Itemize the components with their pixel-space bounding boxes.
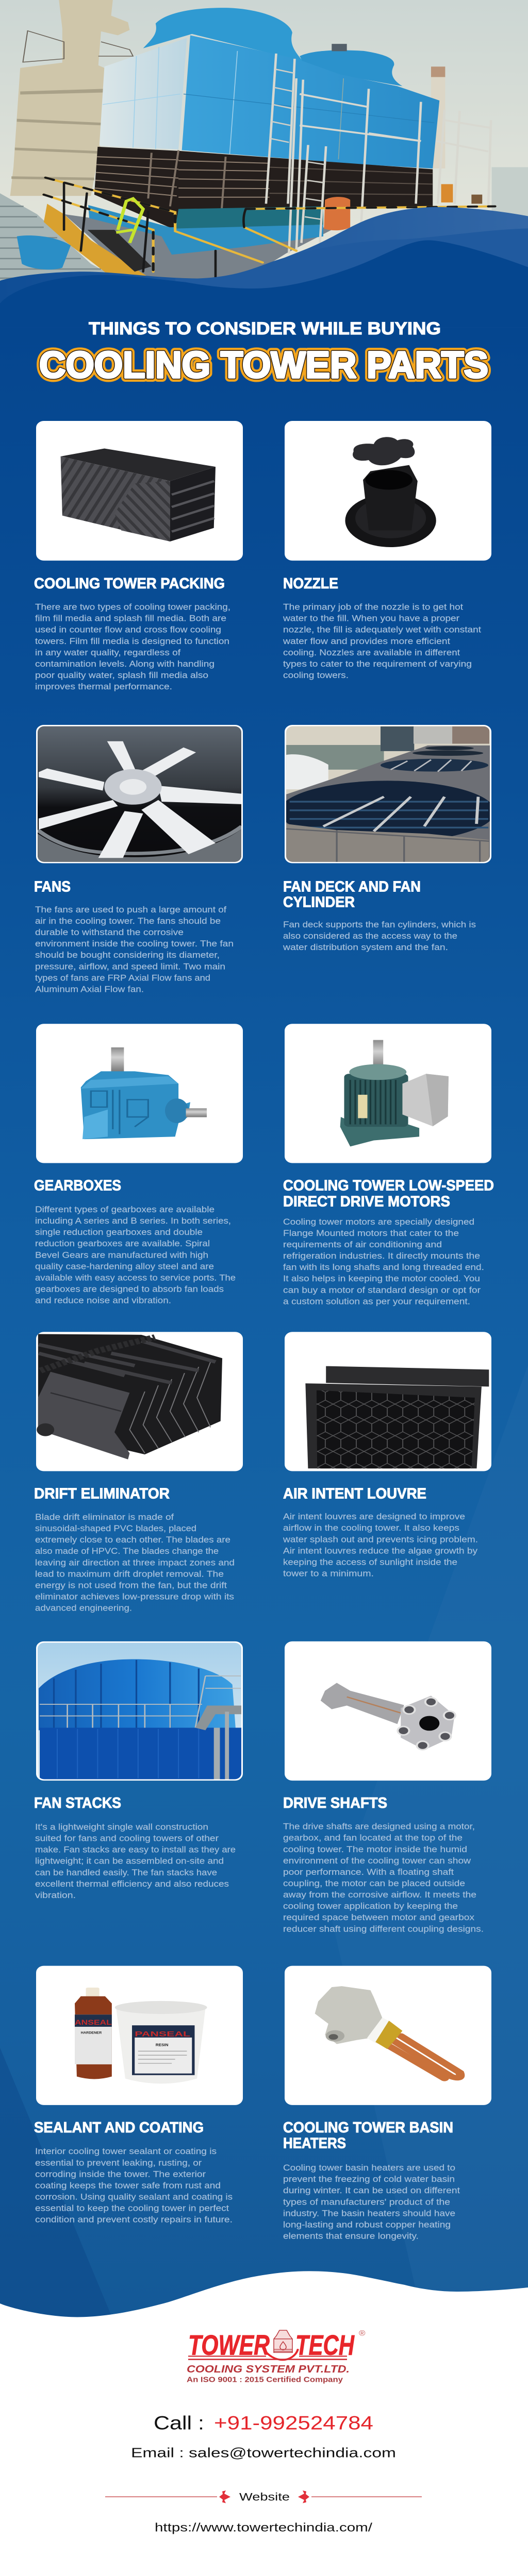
text block bbox=[283, 1512, 478, 1578]
image: drive shaft bbox=[285, 1641, 491, 1781]
text block: and reduce noise and vibration. bbox=[35, 1296, 171, 1305]
text block: long-lasting and robust copper heating bbox=[283, 2219, 451, 2229]
roof left bbox=[0, 193, 114, 285]
text block: corroding inside the tower. The exterior bbox=[35, 2169, 206, 2179]
footer white wave bbox=[0, 2271, 528, 2576]
hero photo: cooling tower bbox=[0, 0, 528, 281]
text block: gearbox, and fan located at the top of the bbox=[283, 1833, 463, 1842]
text block: lead to maximum drift droplet removal. The bbox=[35, 1569, 224, 1579]
heading: GEARBOXES bbox=[34, 1178, 121, 1194]
text block: There are two types of cooling tower packing, bbox=[35, 602, 230, 612]
text block bbox=[35, 1205, 236, 1305]
text block: gearboxes are designed to absorb fan loads bbox=[35, 1284, 224, 1294]
text block: also made of HPVC. The blades change the bbox=[35, 1546, 219, 1556]
text block bbox=[283, 602, 481, 680]
fan stack 2 bbox=[300, 50, 402, 86]
panel: drive shafts bbox=[283, 1641, 491, 1934]
text block: also considered as the access way to the bbox=[283, 931, 457, 941]
text block: Different types of gearboxes are available bbox=[35, 1205, 214, 1214]
heading: SEALANT AND COATING bbox=[34, 2120, 204, 2136]
yellow deck side bbox=[44, 204, 148, 277]
text block: cooling. Nozzles are available in different bbox=[283, 648, 460, 657]
text block bbox=[283, 920, 476, 952]
text block: cooling towers. bbox=[283, 670, 349, 680]
text block: make. Fan stacks are easy to install as they are bbox=[35, 1845, 236, 1854]
text block: poor performance. With a floating shaft bbox=[283, 1867, 454, 1877]
text block: cooling tower. The motor inside the humid bbox=[283, 1844, 467, 1854]
panel: sealant and coating bbox=[34, 1966, 243, 2224]
heading bbox=[283, 1178, 494, 1210]
text block: Cooling tower basin heaters are used to bbox=[283, 2163, 455, 2173]
text block: poor quality water, splash fill media also bbox=[35, 670, 208, 680]
text block: quality case-hardening alloy steel and are bbox=[35, 1261, 214, 1271]
text block bbox=[35, 602, 230, 691]
company name: COOLING SYSTEM PVT.LTD. bbox=[187, 2363, 350, 2375]
safety harness bbox=[116, 198, 143, 243]
text block: eliminator achieves low-pressure drop with its bbox=[35, 1592, 234, 1601]
tower front face bbox=[182, 35, 439, 168]
text block: durable to withstand the corrosive bbox=[35, 927, 184, 937]
logo arc and rules bbox=[188, 2348, 347, 2360]
image: sealant products bbox=[36, 1966, 243, 2105]
text block: It also helps in keeping the motor cooled. You bbox=[283, 1274, 480, 1283]
heading bbox=[283, 879, 421, 910]
text block bbox=[283, 2163, 460, 2241]
text block: The fans are used to push a large amount of bbox=[35, 905, 226, 914]
text block: The drive shafts are designed using a motor, bbox=[283, 1822, 475, 1831]
text block: suited for fans and cooling towers of other bbox=[35, 1834, 219, 1843]
heading: AIR INTENT LOUVRE bbox=[283, 1486, 426, 1502]
text block: vibration. bbox=[35, 1890, 76, 1900]
panel: fan deck and fan cylinder bbox=[279, 725, 495, 952]
text block: airflow in the cooling tower. It also keeps bbox=[283, 1523, 459, 1533]
panel: fan stacks bbox=[34, 1641, 243, 1900]
text block: types of fans are FRP Axial Flow fans and bbox=[35, 973, 210, 982]
heading: NOZZLE bbox=[283, 576, 338, 592]
heading: COOLING TOWER BASIN bbox=[283, 2120, 453, 2136]
orange drum bbox=[324, 197, 350, 230]
blue basin bbox=[88, 205, 323, 255]
heading: COOLING TOWER PACKING bbox=[34, 576, 225, 592]
text block: leaving air direction at three impact zones and bbox=[35, 1557, 235, 1567]
icon: cooling tower with water drop bbox=[274, 2330, 292, 2352]
logo wordmark: TECH bbox=[295, 2330, 355, 2361]
panel: air intent louvre bbox=[283, 1332, 491, 1578]
louver slats bbox=[95, 157, 433, 197]
image: nozzle bbox=[285, 421, 491, 561]
blue tub bbox=[17, 235, 71, 269]
text block: requirements of air conditioning and bbox=[283, 1240, 442, 1249]
railings bbox=[44, 178, 495, 277]
image: sealant products: HARDENER bbox=[81, 2031, 102, 2035]
text block: should be bought considering its diameter, bbox=[35, 950, 220, 960]
image: sealant products: PANSEAL bbox=[135, 2030, 190, 2038]
website url: https://www.towertechindia.com/ bbox=[155, 2521, 372, 2534]
text block: corrosion. Using quality sealant and coating is bbox=[35, 2192, 233, 2201]
phone line: Call : bbox=[154, 2413, 204, 2434]
panel: cooling tower packing bbox=[34, 421, 243, 691]
text block: essential to keep the cooling tower in perfect bbox=[35, 2204, 229, 2213]
text block: contamination levels. Along with handling bbox=[35, 659, 214, 669]
text block: in any water quality, regardless of bbox=[35, 648, 180, 657]
website label: Website bbox=[239, 2491, 290, 2503]
heading: DRIVE SHAFTS bbox=[283, 1795, 387, 1811]
text block: essential to prevent leaking, rusting, or bbox=[35, 2158, 202, 2167]
image: packing block bbox=[36, 421, 243, 561]
heading: CYLINDER bbox=[283, 894, 355, 910]
text block: including A series and B series. In both series, bbox=[35, 1216, 231, 1226]
text block: coupling, the motor can be placed outside bbox=[283, 1878, 465, 1888]
text block: towers. Film fill media is designed to function bbox=[35, 636, 229, 646]
far chimney bbox=[431, 66, 445, 168]
text block: Air intent louvres reduce the algae growth by bbox=[283, 1546, 477, 1555]
motor atop stack 2 bbox=[332, 44, 347, 51]
heading: DRIFT ELIMINATOR bbox=[34, 1486, 170, 1502]
panel: drift eliminator bbox=[34, 1332, 243, 1613]
heading: HEATERS bbox=[283, 2136, 346, 2151]
background shape left bbox=[0, 2048, 113, 2321]
text block: water flow and provides more efficient bbox=[283, 636, 450, 646]
text block: advanced engineering. bbox=[35, 1603, 132, 1613]
text block bbox=[35, 2146, 233, 2224]
heading: COOLING TOWER LOW-SPEED bbox=[283, 1178, 494, 1194]
beige scrubber tower bbox=[10, 0, 133, 196]
text block: water splash out and prevents icing problem. bbox=[283, 1534, 478, 1544]
title: things to consider while buying: THINGS TO CONSIDER WHILE BUYING bbox=[89, 318, 441, 338]
text block: excellent thermal efficiency and also reduces bbox=[35, 1879, 229, 1889]
heading: DIRECT DRIVE MOTORS bbox=[283, 1194, 450, 1210]
text block: Blade drift eliminator is made of bbox=[35, 1512, 174, 1522]
image: basin heater bbox=[285, 1966, 491, 2105]
text block: reduction gearboxes are available. Spiral bbox=[35, 1239, 210, 1248]
text block: away from the corrosive airflow. It meets the bbox=[283, 1890, 476, 1900]
text block: cooling tower application by keeping the bbox=[283, 1901, 458, 1911]
sky bbox=[0, 0, 528, 271]
tower left face bbox=[100, 38, 187, 149]
text block bbox=[283, 1822, 484, 1934]
heading: FAN DECK AND FAN bbox=[283, 879, 421, 895]
image: drift eliminator bbox=[36, 1332, 243, 1471]
image: louvre bbox=[285, 1332, 491, 1472]
panel: cooling tower basin heaters bbox=[283, 1966, 491, 2241]
text block: The primary job of the nozzle is to get hot bbox=[283, 602, 463, 612]
text block: industry. The basin heaters should have bbox=[283, 2208, 455, 2218]
heading: FANS bbox=[34, 879, 71, 895]
image: sealant products: RESIN bbox=[156, 2043, 169, 2047]
louver section bbox=[94, 147, 433, 230]
background shape right bbox=[330, 1365, 528, 2321]
image: gearbox bbox=[36, 1024, 243, 1163]
deck floor bbox=[64, 214, 337, 285]
text block: types of manufacturers' product of the bbox=[283, 2197, 450, 2207]
text block: during winter. It can be used on different bbox=[283, 2185, 460, 2195]
text block: keeping the access of sunlight inside the bbox=[283, 1557, 457, 1567]
text block: required space between motor and gearbox bbox=[283, 1912, 474, 1922]
text block: a custom solution as per your requirement. bbox=[283, 1296, 470, 1306]
text block: environment of the cooling tower can show bbox=[283, 1856, 471, 1866]
email line: Email : sales@towertechindia.com bbox=[131, 2445, 396, 2460]
phone line: +91-992524784 bbox=[214, 2413, 373, 2434]
image: sealant products: ANSEAL bbox=[75, 2019, 112, 2026]
text block: air in the cooling tower. The fans should be bbox=[35, 916, 221, 926]
text block: condition and prevent costly repairs in future. bbox=[35, 2215, 233, 2224]
wave: outer light layer bbox=[0, 207, 528, 328]
text block: single reduction gearboxes and double bbox=[35, 1227, 203, 1237]
text block: prevent the freezing of cold water basin bbox=[283, 2174, 455, 2184]
text block: Cooling tower motors are specially designed bbox=[283, 1217, 474, 1227]
panel: gearboxes bbox=[34, 1024, 243, 1305]
text block: coating keeps the tower safe from rust and bbox=[35, 2181, 221, 2190]
text block: extremely close to each other. The blades are bbox=[35, 1535, 230, 1545]
image: fan bbox=[36, 725, 243, 863]
text block: types to cater to the requirement of varying bbox=[283, 659, 472, 669]
heading bbox=[283, 2120, 453, 2151]
text block: sinusoidal-shaped PVC blades, placed bbox=[35, 1523, 196, 1533]
registered mark: ® bbox=[359, 2329, 366, 2337]
text block: It's a lightweight single wall construction bbox=[35, 1822, 208, 1832]
wave: dark layer bbox=[0, 240, 528, 328]
logo wordmark: TOWER bbox=[188, 2330, 270, 2361]
text block bbox=[35, 1512, 235, 1613]
text block bbox=[283, 1217, 484, 1306]
text block bbox=[35, 905, 234, 994]
image: motor bbox=[285, 1024, 491, 1163]
text block: water distribution system and the fan. bbox=[283, 942, 448, 952]
workers bbox=[441, 184, 482, 204]
text block: elements that ensure longevity. bbox=[283, 2231, 419, 2241]
text block: Fan deck supports the fan cylinders, which is bbox=[283, 920, 476, 929]
text block: lightweight; it can be assembled on-site and bbox=[35, 1856, 224, 1866]
image: fan deck bbox=[279, 725, 495, 863]
ladders and aluminium frames bbox=[266, 54, 491, 253]
text block: nozzle, the fill is adequately wet with constant bbox=[283, 625, 481, 634]
wave: middle layer bbox=[175, 228, 528, 328]
panel: nozzle bbox=[283, 421, 491, 680]
fan stack 1 bbox=[143, 8, 303, 61]
panel: fans bbox=[34, 725, 243, 994]
text block bbox=[35, 1822, 236, 1900]
text block: Interior cooling tower sealant or coating is bbox=[35, 2146, 217, 2156]
icon: fleur left bbox=[219, 2490, 230, 2503]
text block: reducer shaft using different coupling designs. bbox=[283, 1924, 484, 1934]
image: fan stack bbox=[36, 1641, 243, 1781]
certification line: An ISO 9001 : 2015 Certified Company bbox=[187, 2376, 343, 2384]
text block: improves thermal performance. bbox=[35, 682, 172, 691]
text block: Flange Mounted motors that cater to the bbox=[283, 1228, 459, 1238]
text block: Aluminum Axial Flow fan. bbox=[35, 984, 144, 994]
text block: energy is not used from the fan, but the drift bbox=[35, 1581, 227, 1590]
text block: refrigeration industries. It directly mounts the bbox=[283, 1251, 480, 1261]
text block: Air intent louvres are designed to improve bbox=[283, 1512, 465, 1521]
text block: environment inside the cooling tower. The fan bbox=[35, 939, 234, 948]
text block: used in counter flow and cross flow cooling bbox=[35, 625, 221, 634]
panel seams bbox=[103, 47, 434, 159]
text block: water to the fill. When you have a proper bbox=[283, 614, 459, 623]
icon: fleur right bbox=[298, 2490, 309, 2503]
text block: can be handled easily. The fan stacks have bbox=[35, 1868, 217, 1877]
panel: direct drive motors bbox=[283, 1024, 494, 1306]
text block: fan with its long shafts and long threaded end. bbox=[283, 1262, 484, 1272]
text block: pressure, airflow, and speed limit. Two main bbox=[35, 961, 225, 971]
text block: tower to a minimum. bbox=[283, 1569, 374, 1578]
right pale roof bbox=[492, 167, 528, 216]
text block: Bevel Gears are manufactured with high bbox=[35, 1250, 208, 1260]
website divider bbox=[105, 2490, 422, 2503]
heading: FAN STACKS bbox=[34, 1795, 121, 1811]
text block: available with easy access to service ports. The bbox=[35, 1273, 236, 1282]
phone line bbox=[154, 2413, 373, 2434]
logo: Tower Tech bbox=[187, 2329, 366, 2384]
text block: can buy a motor of standard design or opt for bbox=[283, 1285, 481, 1295]
text block: film fill media and splash fill media. Both are bbox=[35, 614, 226, 623]
